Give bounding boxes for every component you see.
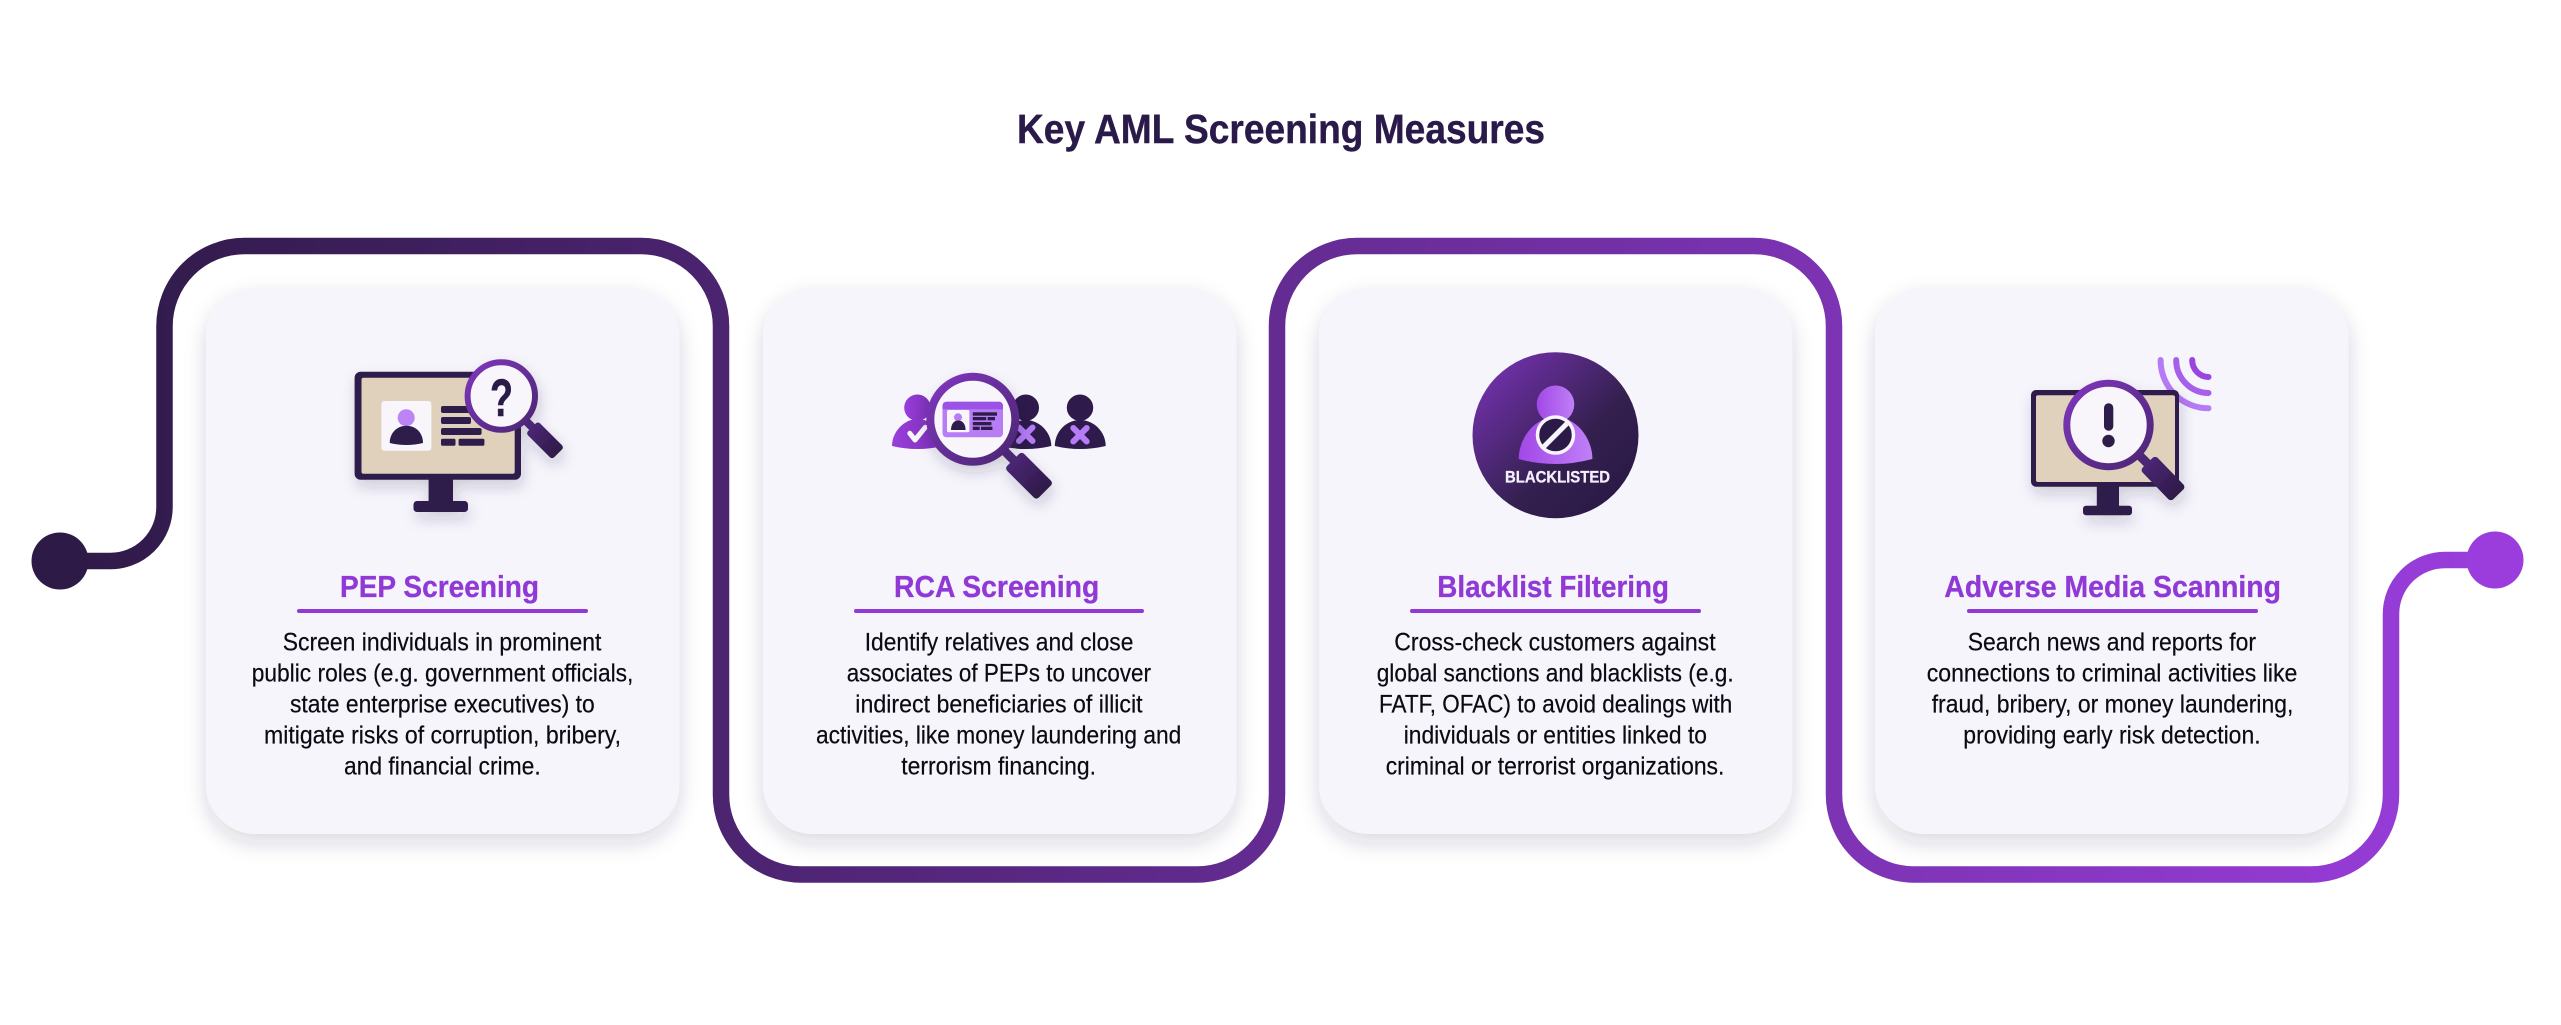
icon: monitor with profile and question magnifier (355, 362, 564, 512)
description: mitigate risks of corruption, bribery, (264, 722, 621, 750)
monitor and magnifier (2031, 383, 2186, 515)
heading: RCA Screening (894, 569, 1099, 604)
heading: Adverse Media Scanning (1944, 569, 2281, 604)
description (1377, 629, 1734, 781)
description: state enterprise executives) to (290, 691, 595, 719)
person approved (892, 394, 943, 449)
heading underline (299, 609, 586, 613)
description: terrorism financing. (901, 753, 1096, 781)
connector path (32, 246, 2524, 874)
heading: Blacklist Filtering (1437, 569, 1669, 604)
description: Identify relatives and close (865, 629, 1133, 657)
description (252, 629, 633, 781)
card background (1875, 287, 2348, 834)
card background (206, 287, 680, 834)
description: individuals or entities linked to (1404, 722, 1707, 750)
description: connections to criminal activities like (1927, 660, 2297, 688)
description: Search news and reports for (1968, 629, 2256, 657)
description: associates of PEPs to uncover (847, 660, 1151, 688)
signal waves (2161, 360, 2208, 408)
icon: blacklisted badge (1472, 352, 1638, 518)
description: indirect beneficiaries of illicit (855, 691, 1143, 719)
icon: people with ID magnifier (892, 377, 1106, 500)
panel: RCA Screening (763, 287, 1236, 834)
description (816, 629, 1181, 781)
person rejected (1055, 394, 1106, 449)
panel: PEP Screening (206, 287, 680, 834)
description: public roles (e.g. government officials, (252, 660, 633, 688)
start dot (32, 532, 88, 590)
description: global sanctions and blacklists (e.g. (1377, 660, 1734, 688)
description: FATF, OFAC) to avoid dealings with (1379, 691, 1732, 719)
description: criminal or terrorist organizations. (1386, 753, 1724, 781)
heading underline (1412, 609, 1699, 613)
icon: blacklisted badge: BLACKLISTED (1505, 468, 1610, 486)
end dot (2466, 532, 2524, 588)
description: Screen individuals in prominent (283, 629, 601, 657)
description: providing early risk detection. (1963, 722, 2261, 750)
magnifier with ID card (930, 377, 1053, 500)
description (1927, 629, 2297, 750)
card background (763, 287, 1236, 834)
heading underline (1969, 609, 2256, 613)
heading: PEP Screening (340, 569, 539, 604)
description: Cross-check customers against (1394, 629, 1716, 657)
title: Key AML Screening Measures (1017, 106, 1545, 152)
description: fraud, bribery, or money laundering, (1932, 691, 2293, 719)
heading underline (856, 609, 1142, 613)
person rejected (1000, 394, 1051, 449)
icon: monitor with profile and question magnifier: ? (490, 369, 513, 428)
panel: Blacklist Filtering (1319, 287, 1792, 834)
description: and financial crime. (344, 753, 541, 781)
card background (1319, 287, 1792, 834)
icon: monitor with alert magnifier and signal waves (2031, 360, 2208, 515)
panel: Adverse Media Scanning (1875, 287, 2348, 834)
description: activities, like money laundering and (816, 722, 1181, 750)
